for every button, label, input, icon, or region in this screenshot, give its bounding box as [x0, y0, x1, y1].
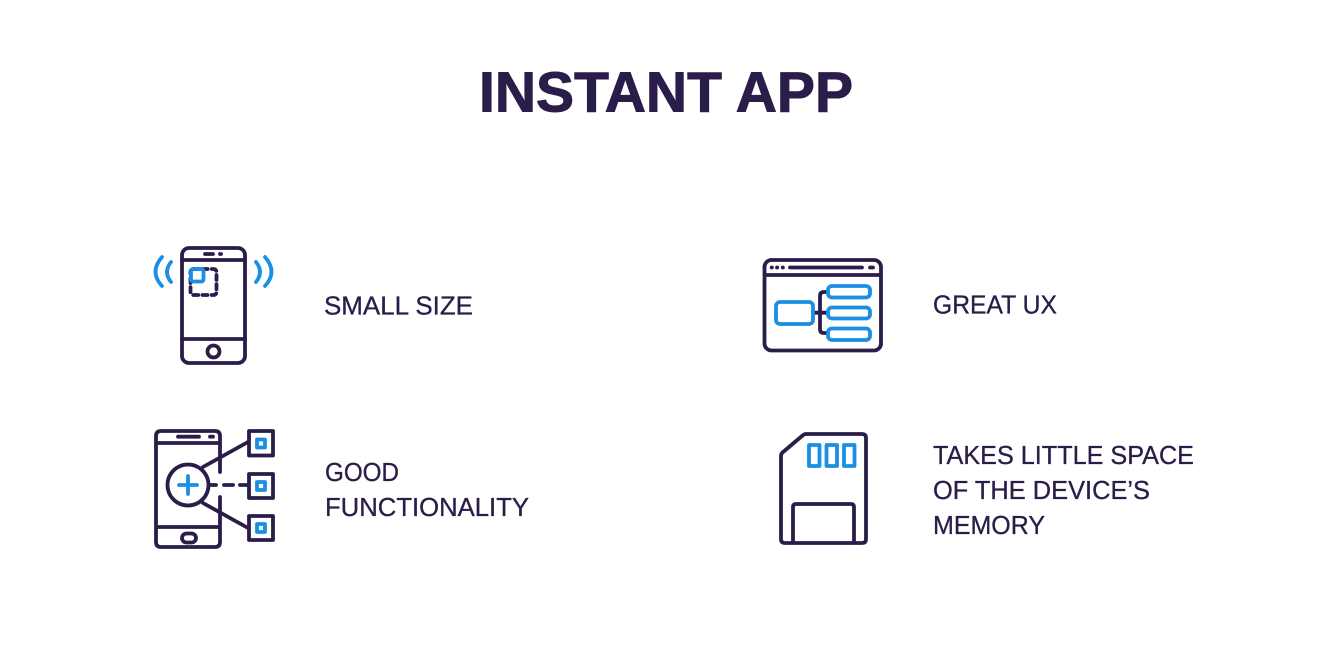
label: good functionality [325, 459, 529, 522]
label: good functionality: FUNCTIONALITY [325, 494, 529, 522]
label: takes little space of the device's memory: TAKES LITTLE SPACE [933, 442, 1194, 470]
label: small size: SMALL SIZE [324, 292, 473, 320]
icon: memory card [781, 434, 866, 543]
icon: browser window with flow diagram [764, 260, 881, 350]
label: takes little space of the device's memory: MEMORY [933, 512, 1045, 540]
icon: phone with vibrating signal [156, 248, 272, 363]
label: takes little space of the device's memory [933, 442, 1194, 540]
label: takes little space of the device's memory: OF THE DEVICE’S [933, 477, 1150, 505]
label: good functionality: GOOD [325, 459, 399, 487]
icon: phone with plus and connected modules [156, 431, 273, 547]
label: great ux: GREAT UX [933, 292, 1057, 320]
title: INSTANT APP [479, 60, 853, 124]
